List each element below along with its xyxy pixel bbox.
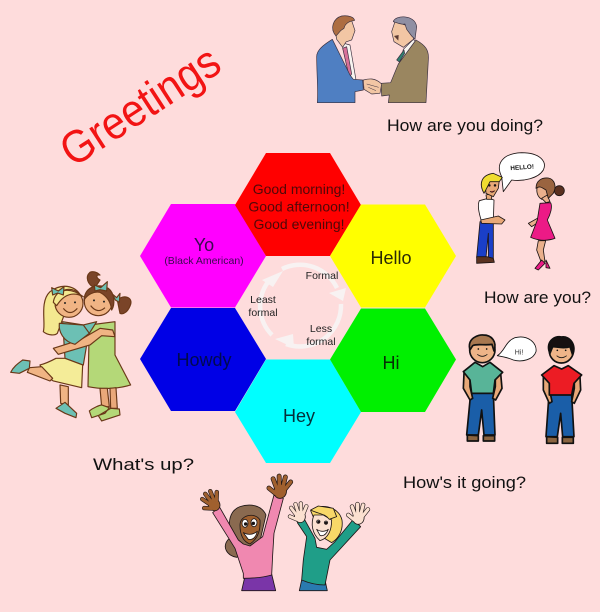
hexagon: Howdy: Howdy bbox=[176, 350, 232, 370]
girl with blonde hair in teal and yellow bbox=[11, 286, 97, 418]
boy in red shirt bbox=[542, 337, 582, 443]
hugging arms bbox=[53, 323, 115, 354]
hexagon: Hello bbox=[330, 204, 456, 308]
hexagon: Yo: (Black American) bbox=[164, 255, 244, 267]
illustration: two women waving bbox=[199, 475, 368, 591]
label: Less formal: formal bbox=[306, 336, 336, 348]
girl with pigtails in green dress bbox=[84, 272, 131, 421]
hexagon diagram bbox=[140, 153, 456, 463]
illustration: boy and girl saying hello bbox=[477, 153, 564, 270]
hexagon: Hey: Hey bbox=[283, 406, 315, 426]
hexagon: Good morning: Good evening! bbox=[253, 216, 345, 232]
caption: How's it going?: How's it going? bbox=[403, 474, 526, 492]
caption: What's up?: What's up? bbox=[93, 456, 194, 474]
caption: How are you doing?: How are you doing? bbox=[387, 117, 543, 135]
hexagon: Hello: Hello bbox=[370, 248, 412, 268]
boy bbox=[477, 173, 505, 263]
woman in pink bbox=[199, 475, 291, 591]
hexagon: Yo: Yo bbox=[194, 235, 214, 255]
woman in teal bbox=[288, 503, 368, 591]
hexagon: Hi bbox=[330, 308, 456, 412]
label: Least formal: formal bbox=[248, 307, 278, 319]
label: Formal: Formal bbox=[306, 270, 338, 282]
illustration: two boys, one saying Hi bbox=[463, 335, 582, 443]
formality cycle arrows bbox=[260, 265, 346, 348]
title: Greetings bbox=[50, 35, 229, 176]
illustration: two girls hugging bbox=[11, 272, 131, 421]
label: Least formal: Least bbox=[250, 294, 276, 306]
hexagon: Hi: Hi bbox=[382, 353, 400, 373]
hexagon: Good morning: Good afternoon! bbox=[248, 198, 350, 214]
hexagon: Good morning bbox=[235, 153, 361, 256]
hexagon: Hey bbox=[235, 360, 361, 463]
hexagon: Howdy bbox=[140, 308, 266, 411]
hexagon: Yo bbox=[140, 204, 266, 308]
boy in teal shirt bbox=[463, 335, 503, 441]
speech bubble: Hi!: Hi! bbox=[515, 349, 523, 356]
caption: How are you?: How are you? bbox=[484, 289, 591, 307]
girl bbox=[528, 178, 564, 270]
illustration: two businessmen shaking hands bbox=[317, 16, 428, 103]
speech bubble: HELLO!: HELLO! bbox=[510, 164, 534, 172]
hexagon: Good morning: Good morning! bbox=[253, 181, 345, 197]
label: Less formal: Less bbox=[310, 323, 332, 335]
